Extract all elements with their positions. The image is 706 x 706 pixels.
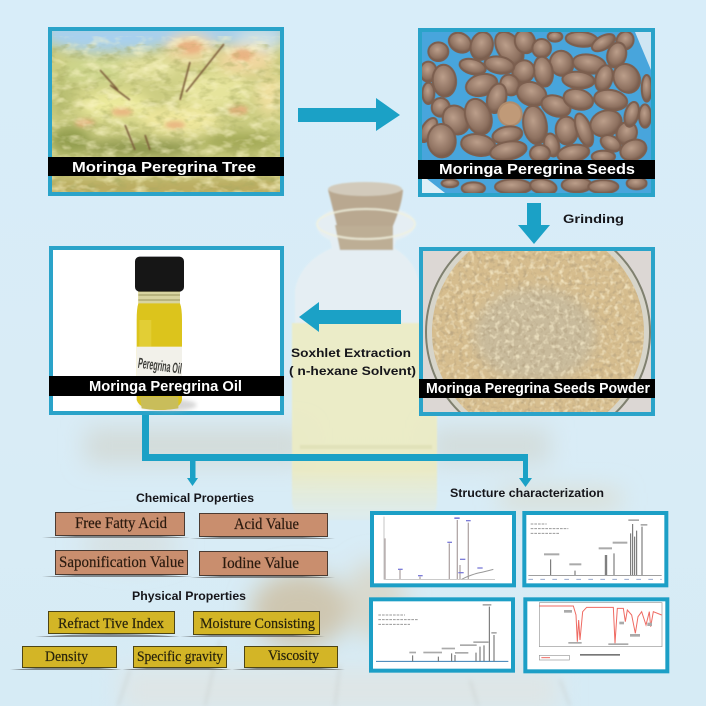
oil caption <box>49 376 284 396</box>
arrow: seeds to powder (grinding) <box>518 203 550 244</box>
box: saponification value: Saponification Value <box>59 554 184 571</box>
extraction label: Soxhlet Extraction <box>291 346 411 360</box>
icon: oil bottle: Peregrina Oil <box>137 356 183 378</box>
box: specific gravity: Specific gravity <box>137 649 223 665</box>
powder caption: Moringa Peregrina Seeds Powder <box>426 381 650 397</box>
box: iodine value: Iodine Value <box>222 555 299 572</box>
box: saponification value <box>42 550 192 577</box>
box: moisture consisting <box>180 612 325 637</box>
heading: physical properties: Physical Properties <box>132 589 246 603</box>
seeds caption <box>418 160 655 179</box>
tree caption: Moringa Peregrina Tree <box>72 160 256 176</box>
box: iodine value <box>190 552 335 578</box>
heading: chemical properties: Chemical Properties <box>136 491 254 505</box>
box: refractive index: Refract Tive Index <box>58 616 164 632</box>
box: refractive index <box>35 612 180 637</box>
grinding label: Grinding <box>563 212 624 226</box>
arrow: powder to oil (extraction) <box>299 302 401 332</box>
oil caption: Moringa Peregrina Oil <box>89 379 242 395</box>
box: viscosity: Viscosity <box>268 648 319 664</box>
icon: oil bottle <box>135 257 197 411</box>
box: viscosity <box>232 646 345 670</box>
panel: oil bottle photo <box>49 246 284 415</box>
box: free fatty acid <box>42 512 190 538</box>
chart: FTIR spectrum <box>523 597 669 673</box>
extraction label <box>289 346 416 378</box>
panel: physical property boxes <box>10 612 345 670</box>
box: acid value: Acid Value <box>234 516 299 533</box>
box: density <box>10 646 122 670</box>
heading: structure characterization: Structure characterization <box>450 486 604 500</box>
chart: proton NMR spectrum <box>369 597 515 673</box>
box: specific gravity <box>122 646 232 670</box>
box: moisture consisting: Moisture Consisting <box>200 616 315 632</box>
arrow: tree to seeds <box>298 98 400 131</box>
panel: seeds photo <box>416 27 655 197</box>
connector arrow: oil to properties <box>142 415 532 487</box>
panel: seeds powder photo <box>419 247 655 416</box>
box: density: Density <box>45 649 88 665</box>
chart: carbon NMR spectrum <box>522 511 668 587</box>
chart: mass spectrum <box>370 511 516 587</box>
extraction label: ( n-hexane Solvent) <box>289 364 416 378</box>
panel: chemical property boxes <box>42 512 335 578</box>
box: free fatty acid: Free Fatty Acid <box>75 515 167 532</box>
tree caption <box>48 157 284 176</box>
seeds caption: Moringa Peregrina Seeds <box>439 162 635 178</box>
panel: tree photo <box>45 22 285 198</box>
box: acid value <box>190 514 335 539</box>
